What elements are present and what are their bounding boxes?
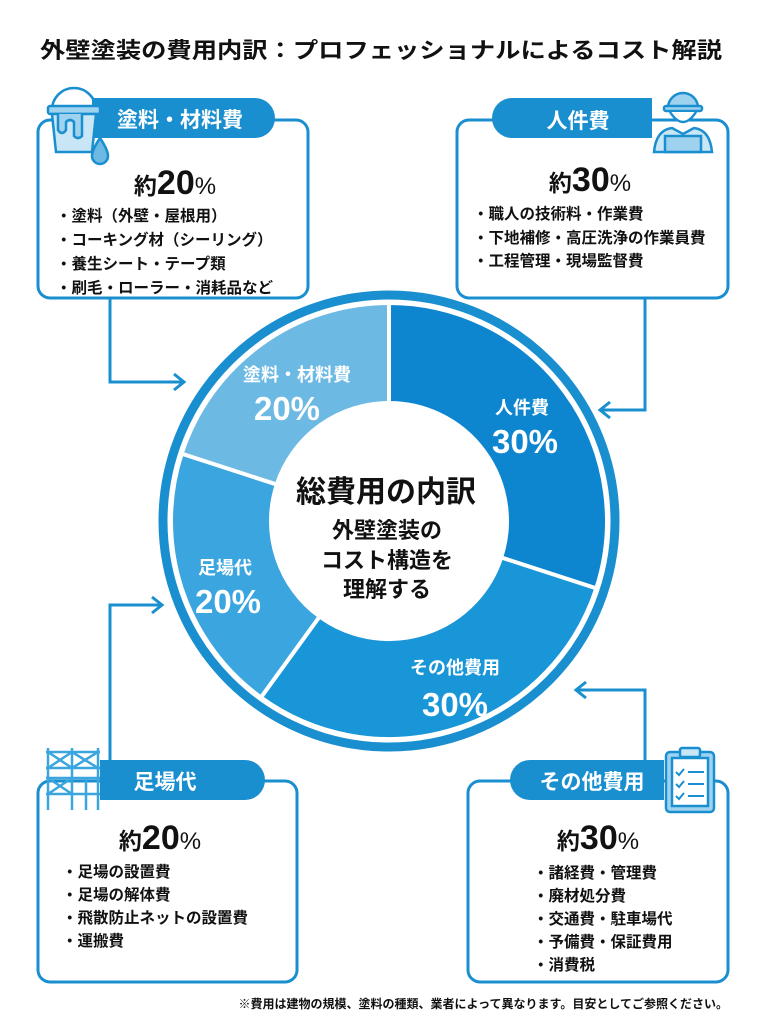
bullet list: ・塗料（外壁・屋根用） bbox=[56, 206, 227, 225]
percentage: 約20% bbox=[134, 164, 216, 202]
bullet list: ・消費税 bbox=[533, 956, 596, 974]
icon: scaffolding bbox=[46, 748, 100, 810]
arrow: other to donut bbox=[576, 682, 645, 760]
segment labels: 30% bbox=[422, 686, 488, 723]
bullet list: ・諸経費・管理費 bbox=[533, 863, 657, 882]
segment labels: 人件費 bbox=[495, 398, 549, 418]
bullet list: ・職人の技術料・作業費 bbox=[473, 204, 644, 223]
bullet list: ・刷毛・ローラー・消耗品など bbox=[56, 279, 274, 297]
label pill: scaffolding bbox=[100, 760, 265, 800]
segment: labor 30% bbox=[389, 303, 607, 588]
bullet list: ・飛散防止ネットの設置費 bbox=[62, 909, 248, 927]
segment labels bbox=[195, 365, 558, 723]
panel: other costs: その他費用 bbox=[540, 771, 644, 794]
bullet list bbox=[56, 206, 274, 297]
label pill: materials bbox=[92, 98, 275, 138]
panel: materials: 塗料・材料費 bbox=[117, 109, 243, 132]
segment labels: 塗料・材料費 bbox=[243, 365, 351, 385]
percentage: 約30% bbox=[557, 819, 639, 857]
center text bbox=[296, 476, 476, 602]
segment: materials 20% bbox=[182, 303, 389, 484]
segment: other 30% bbox=[261, 558, 596, 739]
percentage: 約30% bbox=[549, 161, 631, 199]
bullet list: ・下地補修・高圧洗浄の作業員費 bbox=[473, 228, 706, 247]
bullet list bbox=[533, 863, 673, 974]
label pill: other costs bbox=[510, 760, 664, 800]
title: 外壁塗装の費用内訳：プロフェッショナルによるコスト解説 bbox=[40, 38, 722, 63]
panel: scaffolding: 足場代 bbox=[134, 771, 196, 794]
center text: 外壁塗装の bbox=[332, 518, 442, 543]
panel: materials bbox=[38, 88, 308, 298]
center text: 理解する bbox=[343, 577, 431, 602]
segment: scaffolding 20% bbox=[171, 454, 320, 697]
segment labels: その他費用 bbox=[410, 658, 500, 678]
bullet list: ・足場の設置費 bbox=[62, 863, 171, 881]
bullet list: ・廃材処分費 bbox=[533, 886, 626, 905]
segment labels: 20% bbox=[254, 390, 320, 427]
bullet list: ・養生シート・テープ類 bbox=[56, 254, 226, 273]
bullet list: ・コーキング材（シーリング） bbox=[56, 230, 273, 249]
panel: labor: 人件費 bbox=[546, 110, 610, 133]
panel: other costs bbox=[468, 748, 728, 982]
center text: 総費用の内訳 bbox=[296, 476, 476, 509]
panel: scaffolding bbox=[38, 748, 297, 982]
icon: worker bbox=[654, 93, 712, 152]
percentage: 約20% bbox=[119, 819, 201, 857]
segment labels: 30% bbox=[492, 423, 558, 460]
bullet list bbox=[473, 204, 706, 270]
center text: コスト構造を bbox=[321, 548, 453, 573]
bullet list: ・予備費・保証費用 bbox=[533, 933, 673, 951]
icon: clipboard bbox=[666, 748, 714, 812]
bullet list: ・交通費・駐車場代 bbox=[533, 909, 673, 928]
label pill: labor bbox=[492, 98, 652, 138]
bullet list: ・足場の解体費 bbox=[62, 886, 171, 904]
bullet list bbox=[62, 863, 248, 950]
bullet list: ・運搬費 bbox=[62, 932, 124, 950]
footnote: ※費用は建物の規模、塗料の種類、業者によって異なります。目安としてご参照ください。 bbox=[239, 996, 728, 1011]
segment labels: 20% bbox=[195, 583, 261, 620]
bullet list: ・工程管理・現場監督費 bbox=[473, 251, 644, 270]
panel: labor bbox=[457, 93, 728, 298]
arrow: scaffolding to donut bbox=[110, 597, 162, 780]
arrow: materials to donut bbox=[110, 298, 184, 390]
arrow: labor to donut bbox=[600, 298, 645, 418]
icon: paint bucket bbox=[48, 88, 108, 164]
donut chart bbox=[163, 295, 615, 747]
segment labels: 足場代 bbox=[198, 558, 252, 578]
